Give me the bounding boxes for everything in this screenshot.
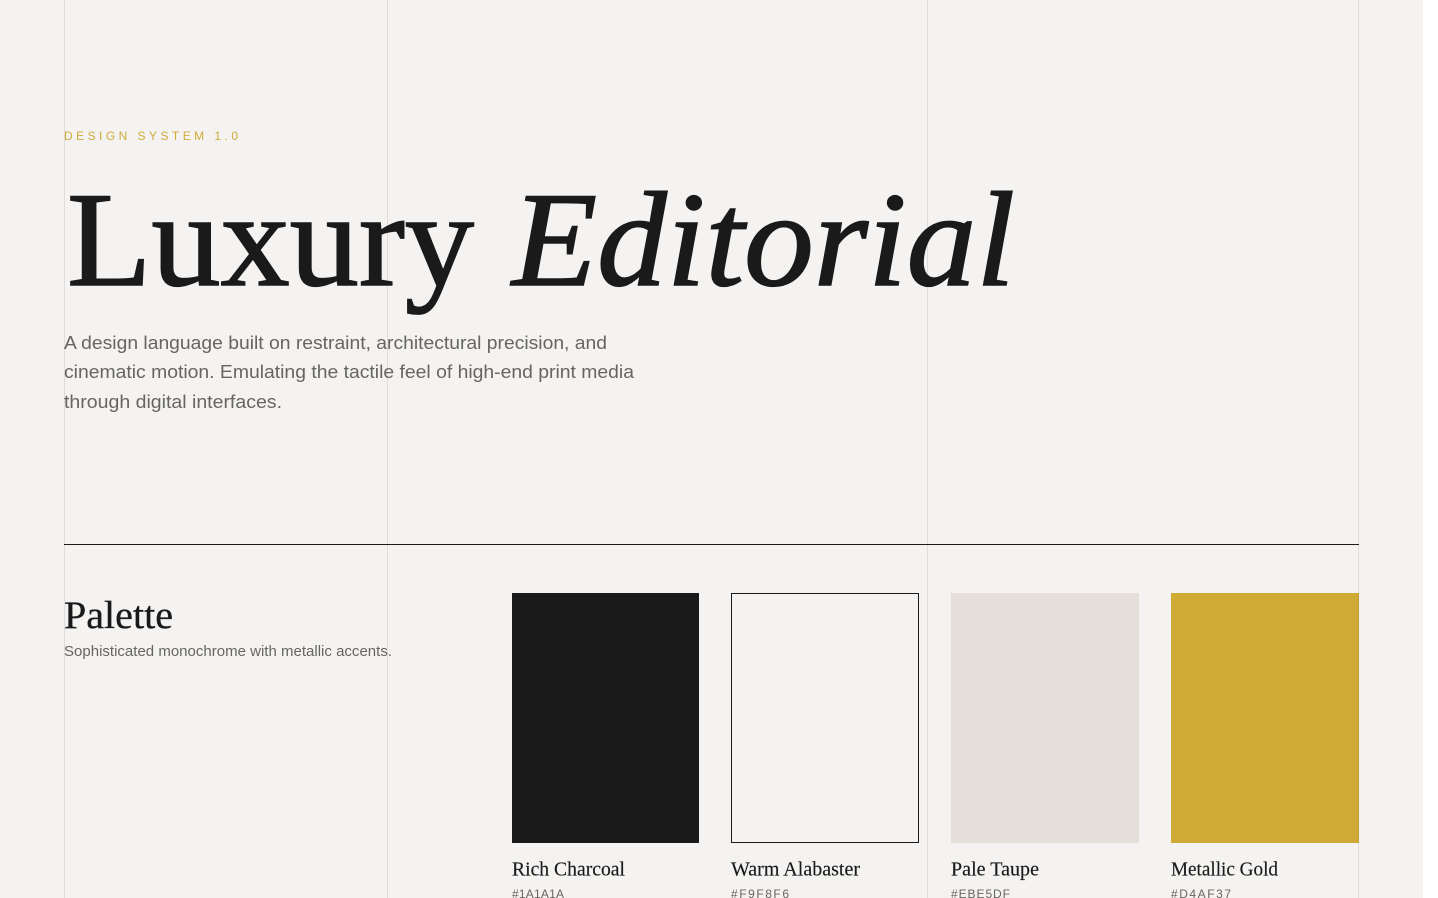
title: [67, 166, 1015, 315]
swatch: Pale Taupe: [951, 593, 1139, 898]
panel: palette heading: Palette: [64, 594, 173, 637]
swatch: Warm Alabaster: Warm Alabaster: [731, 858, 860, 880]
swatch: Metallic Gold: [1171, 593, 1359, 898]
title: Editorial: [510, 166, 1015, 315]
panel: palette heading: Sophisticated monochrome with metallic accents.: [64, 644, 392, 660]
swatch: Warm Alabaster: [731, 594, 918, 898]
intro paragraph: cinematic motion. Emulating the tactile feel of high-end print media: [64, 361, 635, 382]
section rule: [64, 544, 1359, 545]
swatch: Rich Charcoal: [512, 593, 699, 898]
swatch: Metallic Gold: Metallic Gold: [1171, 858, 1278, 880]
intro paragraph: A design language built on restraint, architectural precision, and: [64, 332, 607, 353]
intro paragraph: [64, 332, 635, 412]
panel: palette heading: [64, 594, 392, 660]
swatch: Rich Charcoal: Rich Charcoal: [512, 858, 625, 880]
swatch: Pale Taupe: Pale Taupe: [951, 858, 1039, 880]
intro paragraph: through digital interfaces.: [64, 391, 282, 412]
eyebrow label: DESIGN SYSTEM 1.0: [64, 129, 238, 143]
title: Luxury: [67, 166, 474, 315]
